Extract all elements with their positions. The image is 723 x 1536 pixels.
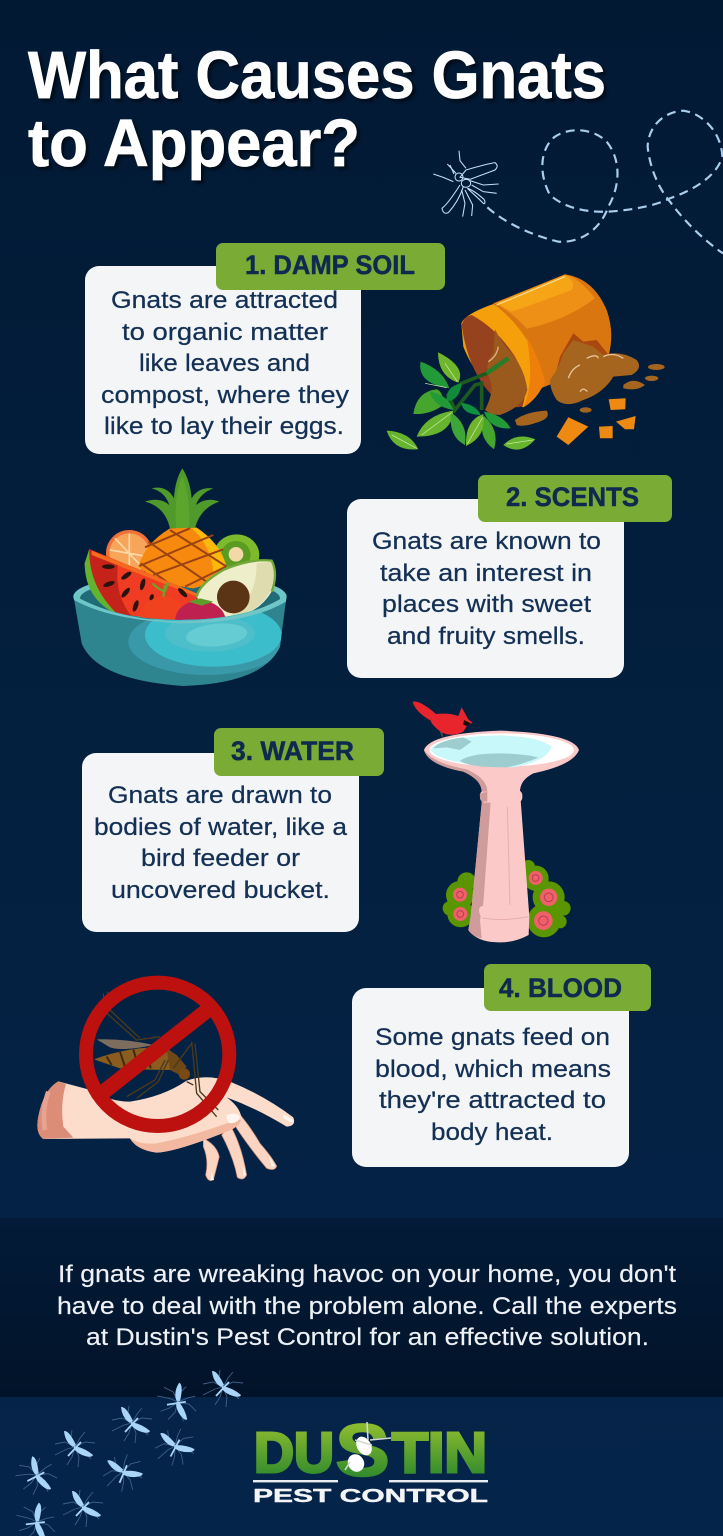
callout text: have to deal with the problem alone. Call the experts xyxy=(57,1293,677,1320)
body text: uncovered bucket. xyxy=(111,877,330,904)
callout text: If gnats are wreaking havoc on your home, you don't xyxy=(58,1261,676,1288)
body text xyxy=(372,528,601,650)
tag xyxy=(484,964,651,1011)
body text: blood, which means xyxy=(375,1056,611,1083)
body text: and fruity smells. xyxy=(387,623,585,650)
tag xyxy=(478,475,672,522)
callout text: at Dustin's Pest Control for an effective solution. xyxy=(86,1324,649,1351)
icon: fruit bowl xyxy=(73,468,287,686)
tag xyxy=(216,243,445,290)
panel: damp soil xyxy=(85,243,445,454)
logo: Dustin Pest Control: S xyxy=(335,1409,390,1492)
tag: 2. SCENTS xyxy=(506,482,639,512)
body text xyxy=(375,1024,611,1146)
card xyxy=(347,499,624,678)
callout band xyxy=(0,1218,723,1397)
tag: 4. BLOOD xyxy=(499,973,622,1003)
icon: swarm of gnats xyxy=(9,1370,243,1536)
body text: like leaves and xyxy=(139,350,310,377)
body text: body heat. xyxy=(431,1119,553,1146)
body text: they're attracted to xyxy=(379,1087,606,1114)
logo: Dustin Pest Control: DU xyxy=(254,1421,334,1485)
body text: places with sweet xyxy=(382,591,591,618)
icon: no-mosquito sign over hand xyxy=(37,983,294,1181)
body text: Gnats are attracted xyxy=(111,287,338,314)
panel: water xyxy=(82,728,384,932)
body text: Some gnats feed on xyxy=(375,1024,610,1051)
body text: like to lay their eggs. xyxy=(104,413,344,440)
title xyxy=(28,38,606,181)
body text: compost, where they xyxy=(101,382,350,409)
body text: take an interest in xyxy=(380,560,592,587)
icon: flying mosquito with dashed flight path xyxy=(433,111,723,253)
icon: tipped flower pot with soil and leaves xyxy=(387,274,665,450)
body text xyxy=(101,287,350,440)
panel: blood xyxy=(352,964,651,1167)
body text: bodies of water, like a xyxy=(94,814,347,841)
card xyxy=(82,753,359,932)
title: to Appear? xyxy=(28,106,360,181)
card xyxy=(352,988,629,1167)
logo: Dustin Pest Control xyxy=(253,1409,488,1506)
panel: scents xyxy=(347,475,672,678)
card xyxy=(85,266,361,454)
logo: Dustin Pest Control: TIN xyxy=(392,1421,487,1485)
body text: Gnats are drawn to xyxy=(108,782,332,809)
tag: 3. WATER xyxy=(231,736,354,766)
title: What Causes Gnats xyxy=(28,38,606,113)
body text: Gnats are known to xyxy=(372,528,601,555)
tag: 1. DAMP SOIL xyxy=(245,250,415,280)
logo: Dustin Pest Control: PEST CONTROL xyxy=(253,1486,488,1506)
body text xyxy=(94,782,347,904)
body text: to organic matter xyxy=(122,319,328,346)
icon: bird bath with cardinal and roses xyxy=(413,701,579,942)
body text: bird feeder or xyxy=(141,845,300,872)
callout text xyxy=(57,1261,677,1351)
tag xyxy=(214,728,384,776)
